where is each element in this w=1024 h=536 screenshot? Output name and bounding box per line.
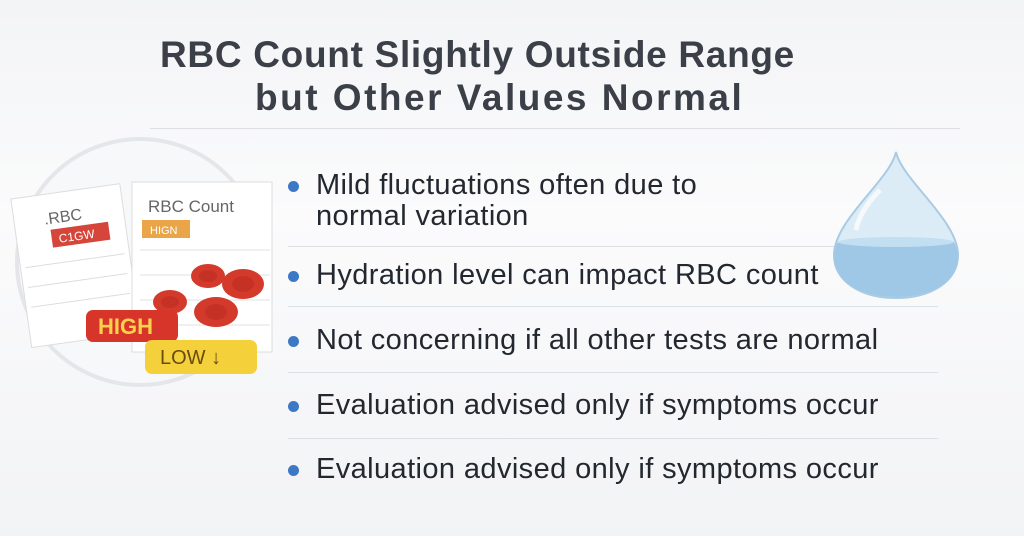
bullet 2: Hydration level can impact RBC count: [316, 259, 819, 291]
bullet 1: [288, 169, 697, 232]
bullet 3: Not concerning if all other tests are normal: [316, 324, 878, 356]
illustration: lab report with blood cells: C1GW: [58, 227, 96, 246]
bullet list: [288, 169, 879, 485]
title: [160, 34, 795, 118]
bullet 5: Evaluation advised only if symptoms occur: [316, 453, 879, 485]
illustration: lab report with blood cells: HIGN: [150, 225, 178, 237]
title: but Other Values Normal: [255, 77, 744, 118]
illustration: lab report with blood cells: HIGH: [98, 314, 153, 339]
bullet 1: normal variation: [316, 200, 529, 232]
title: RBC Count Slightly Outside Range: [160, 34, 795, 75]
LOW tag: [145, 340, 257, 374]
illustration: lab report with blood cells: .RBC: [43, 206, 83, 229]
HIGH tag: [86, 310, 178, 342]
illustration: lab report with blood cells: RBC Count: [148, 197, 234, 216]
bullet 4: Evaluation advised only if symptoms occur: [316, 389, 879, 421]
icon: water drop: [833, 152, 959, 299]
bullet 1: Mild fluctuations often due to: [316, 169, 697, 201]
illustration: lab report with blood cells: LOW ↓: [160, 347, 221, 369]
red blood cells: [153, 264, 264, 327]
illustration: lab report with blood cells: [10, 137, 272, 387]
